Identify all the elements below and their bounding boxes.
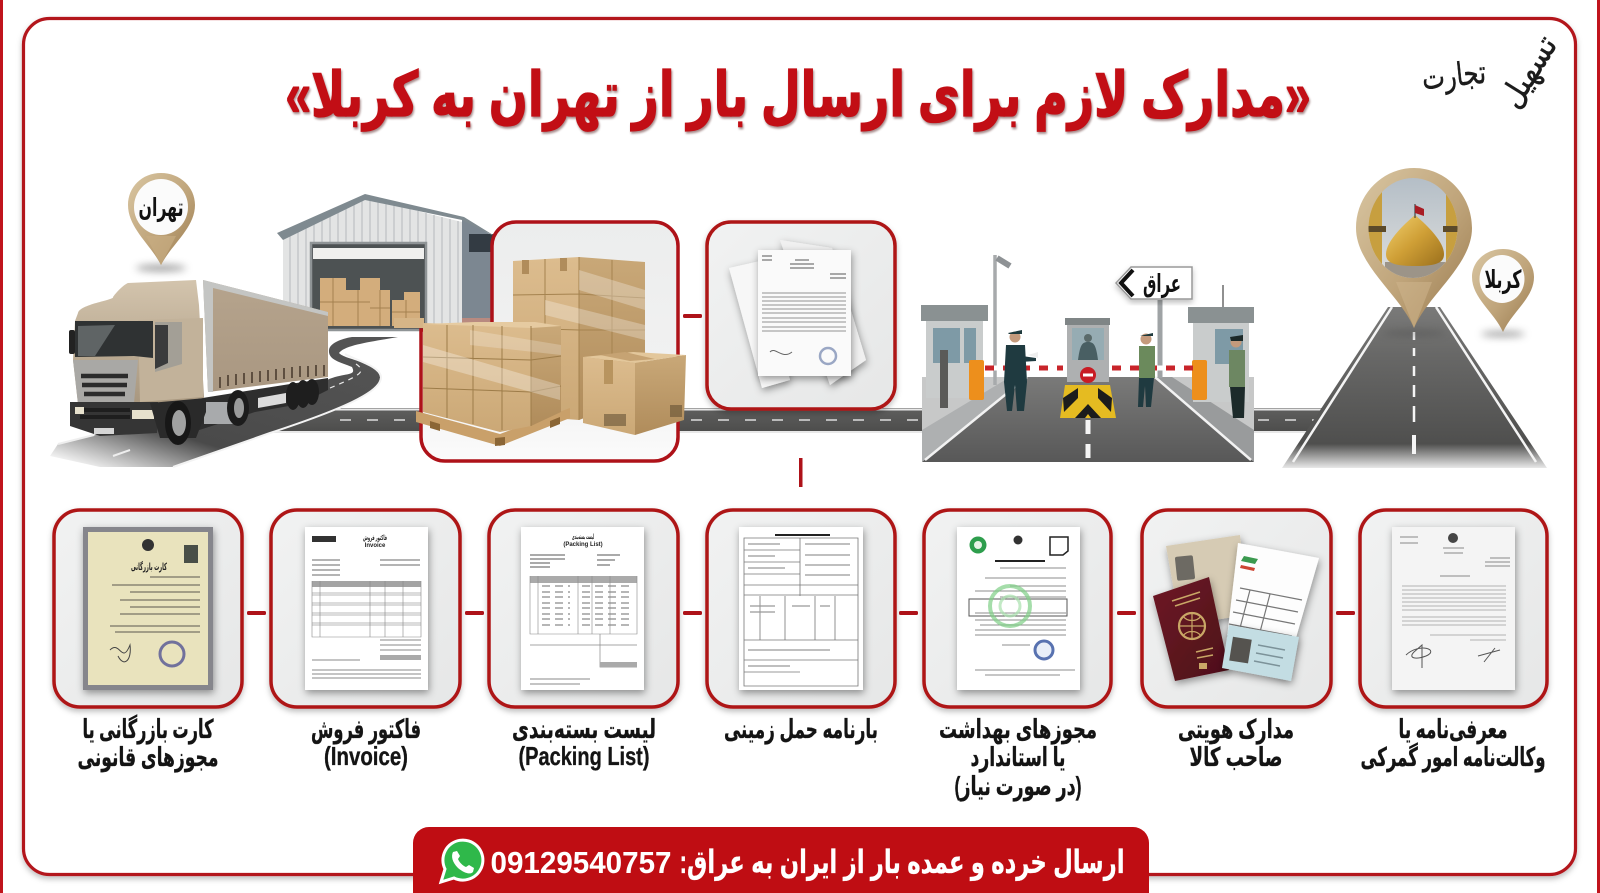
guard middle xyxy=(1138,333,1155,407)
windshield xyxy=(75,321,153,358)
panel: waybill xyxy=(707,510,895,707)
right booth xyxy=(1193,322,1249,402)
caption: invoice: (Invoice) xyxy=(324,741,408,771)
pin: Tehran: تهران xyxy=(138,194,184,223)
caption: health permits: یا استاندارد xyxy=(970,742,1066,772)
national card xyxy=(1166,535,1248,625)
icon: WhatsApp xyxy=(441,840,483,882)
phone number: 09129540757 xyxy=(490,845,672,880)
pallet xyxy=(416,408,570,446)
ID card xyxy=(1222,625,1299,681)
letter page xyxy=(758,250,851,376)
connector xyxy=(1117,611,1136,615)
warehouse front wall xyxy=(283,198,462,330)
warehouse side wall xyxy=(462,218,500,330)
panel: invoice xyxy=(271,510,460,707)
connector xyxy=(899,611,918,615)
panel: packing list xyxy=(489,510,678,707)
back sheets xyxy=(729,261,790,388)
connector xyxy=(465,611,484,615)
sign: Iraq xyxy=(1116,267,1192,378)
connector: road to document row xyxy=(799,458,802,487)
trailer wheels xyxy=(286,382,300,410)
caption: trade card: کارت بازرگانی یا xyxy=(82,714,214,744)
road to Karbala xyxy=(1282,307,1547,468)
banner text: ارسال خرده و عمده بار از ایران به عراق: xyxy=(680,844,1124,881)
caption: invoice: فاکتور فروش xyxy=(311,714,421,745)
curving road from warehouse xyxy=(50,337,398,467)
camera pole xyxy=(993,255,997,385)
trailer xyxy=(203,280,328,392)
panel: health permits xyxy=(924,510,1111,707)
caption: customs xyxy=(1360,714,1546,773)
caption: identity documents: صاحب کالا xyxy=(1190,742,1282,772)
caption: health permits: مجوزهای بهداشت xyxy=(939,714,1097,745)
pin: Karbala label xyxy=(1472,249,1534,337)
pin: Karbala shrine xyxy=(1356,168,1472,336)
panel: packing list: لیست بسته‌بندی xyxy=(572,534,594,541)
connector xyxy=(683,611,702,615)
panel: owner identity documents xyxy=(1142,510,1331,707)
shrine image xyxy=(1368,178,1458,278)
warehouse roof xyxy=(277,194,498,240)
bumper xyxy=(70,402,158,436)
panel: trade card xyxy=(54,510,242,707)
caption: trade card xyxy=(78,714,218,773)
connector: boxes to letter xyxy=(683,314,702,318)
logo: Tashil Tejarat: تسهیل xyxy=(1492,29,1565,115)
connector xyxy=(247,611,266,615)
guard right xyxy=(1229,335,1245,418)
mirror xyxy=(69,330,75,354)
panel: boxes card xyxy=(416,222,686,461)
back box stack xyxy=(513,257,579,420)
front wheel xyxy=(165,401,191,445)
left booth xyxy=(926,318,983,398)
wheel arch xyxy=(150,398,206,438)
ground xyxy=(922,377,1254,462)
boxes inside warehouse xyxy=(320,278,420,326)
horizontal road xyxy=(273,408,1323,433)
checkpoint scene xyxy=(921,255,1254,462)
guard left xyxy=(1004,330,1038,411)
front right carton xyxy=(583,357,635,435)
form xyxy=(1225,543,1319,676)
caption: invoice xyxy=(311,714,421,771)
pin: Tehran xyxy=(128,173,195,272)
panel: invoice: فاکتور فروش xyxy=(363,534,387,542)
grille xyxy=(73,360,138,403)
caption: customs: معرفی‌نامه یا xyxy=(1398,714,1508,745)
contact banner xyxy=(413,827,1149,893)
panel: invoice: Invoice xyxy=(365,543,386,549)
passport xyxy=(1153,577,1229,681)
logo: Tashil Tejarat xyxy=(1420,29,1565,115)
panel: introduction letter card xyxy=(707,222,895,409)
caption: trade card: مجوزهای قانونی xyxy=(78,742,218,773)
caption: health permits: (در صورت نیاز) xyxy=(954,771,1082,802)
cab body xyxy=(73,280,204,404)
center booth xyxy=(1067,322,1109,382)
chevron bollard xyxy=(1060,385,1116,418)
pin: Karbala label: کربلا xyxy=(1484,266,1522,295)
chassis xyxy=(190,378,328,433)
panel: packing list: (Packing List) xyxy=(563,542,603,548)
connector xyxy=(1336,611,1355,615)
panel: customs power of attorney xyxy=(1360,510,1547,707)
front box stack xyxy=(423,323,531,432)
logo: Tashil Tejarat: تجارت xyxy=(1420,54,1488,97)
caption: health permits xyxy=(939,714,1097,802)
sign: Iraq: عراق xyxy=(1143,270,1181,299)
caption: packing list: (Packing List) xyxy=(518,741,650,771)
caption: identity documents: مدارک هویتی xyxy=(1178,714,1294,745)
panel: trade card: کارت بازرگانی xyxy=(131,560,167,573)
caption: identity documents xyxy=(1178,714,1294,772)
caption: packing list: لیست بسته‌بندی xyxy=(512,714,656,744)
caption: waybill: بارنامه حمل زمینی xyxy=(724,714,878,744)
warehouse xyxy=(277,194,500,330)
warehouse door xyxy=(311,243,426,330)
truck xyxy=(69,280,328,445)
caption: packing list xyxy=(512,714,656,771)
barrier gates xyxy=(969,360,984,400)
